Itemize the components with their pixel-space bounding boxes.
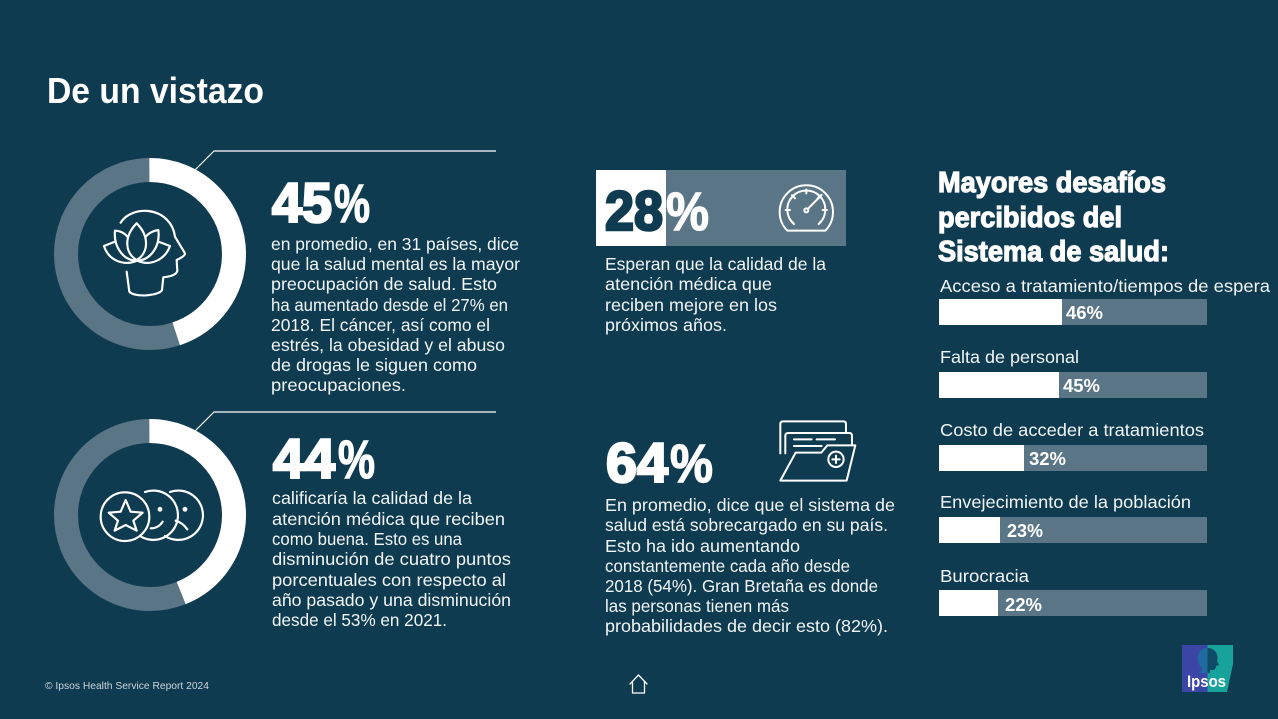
bar: ageing 23%: 23% xyxy=(1007,520,1043,541)
bar: bureaucracy 22% xyxy=(939,566,1207,616)
text block: mental health: ha aumentado desde el 27% en xyxy=(271,295,508,315)
stat: 45% xyxy=(272,171,370,234)
text block: mental health: estrés, la obesidad y el abuso xyxy=(271,335,505,355)
stat: 45%: % xyxy=(334,174,370,234)
bar: ageing 23% xyxy=(939,492,1207,543)
bar: access 46%: Acceso a tratamiento/tiempos de espera xyxy=(940,276,1270,296)
stat: 44% xyxy=(273,427,375,490)
panel: expected improvement 28% xyxy=(596,170,846,335)
text block: expected improvement: atención médica que xyxy=(605,274,772,294)
heading: challenges: Mayores desafíos xyxy=(938,167,1166,199)
stat: 64%: % xyxy=(670,434,713,494)
title: De un vistazo xyxy=(47,70,264,111)
panel: quality of care 44% xyxy=(66,412,511,630)
bar: ageing 23%: Envejecimiento de la población xyxy=(940,492,1191,512)
donut chart: 44% xyxy=(66,431,234,599)
bar: cost 32%: 32% xyxy=(1029,448,1066,469)
bar: access 46% xyxy=(939,276,1270,325)
text block: overloaded system xyxy=(605,495,895,636)
bar: bureaucracy 22%: Burocracia xyxy=(940,566,1029,586)
panel: overloaded system 64% xyxy=(605,421,895,636)
text block: quality of care xyxy=(272,488,511,630)
text block: quality of care: como buena. Esto es una xyxy=(272,529,462,549)
text block: mental health: en promedio, en 31 países, dice xyxy=(271,234,519,254)
icon: home xyxy=(630,675,647,693)
bar: cost 32% xyxy=(939,420,1207,471)
stat: 28%: % xyxy=(666,182,709,242)
stat: 28%: 28 xyxy=(605,179,663,242)
stat: 28% xyxy=(605,179,709,242)
text block: mental health: preocupaciones. xyxy=(271,375,406,395)
text block: overloaded system: constantemente cada año desde xyxy=(605,556,850,576)
bar: staffing 45% xyxy=(939,347,1207,398)
bar: cost 32%: Costo de acceder a tratamientos xyxy=(940,420,1204,440)
text block: expected improvement: reciben mejore en los xyxy=(605,295,777,315)
text block: overloaded system: las personas tienen más xyxy=(605,596,789,616)
text block: overloaded system: Esto ha ido aumentando xyxy=(605,536,800,556)
stat: 64% xyxy=(606,431,713,494)
icon: star and faces xyxy=(101,491,203,541)
text block: quality of care: desde el 53% en 2021. xyxy=(272,610,447,630)
logo: Ipsos xyxy=(1182,645,1233,692)
text block: mental health: que la salud mental es la mayor xyxy=(271,254,520,274)
stat: 64%: 64 xyxy=(606,431,668,494)
text block: mental health xyxy=(271,234,520,395)
text block: quality of care: atención médica que reciben xyxy=(272,509,505,529)
text block: overloaded system: salud está sobrecargado en su país. xyxy=(605,515,888,535)
text block: expected improvement xyxy=(605,254,826,335)
stat: 45%: 45 xyxy=(272,171,332,234)
donut chart: 45% xyxy=(66,170,234,338)
text block: overloaded system: En promedio, dice que el sistema de xyxy=(605,495,895,515)
panel: biggest challenges xyxy=(938,167,1270,616)
stat: 44%: % xyxy=(338,430,375,490)
bar: access 46%: 46% xyxy=(1066,302,1103,323)
text block: overloaded system: 2018 (54%). Gran Bretaña es donde xyxy=(605,576,878,596)
text block: quality of care: disminución de cuatro puntos xyxy=(272,549,511,569)
text block: mental health: de drogas le siguen como xyxy=(271,355,477,375)
heading: challenges: percibidos del xyxy=(938,202,1122,234)
heading: challenges xyxy=(938,167,1169,268)
icon: speedometer xyxy=(780,185,833,231)
bar: staffing 45%: Falta de personal xyxy=(940,347,1079,367)
stat: 44%: 44 xyxy=(273,427,335,490)
text block: quality of care: porcentuales con respecto al xyxy=(272,570,506,590)
text block: expected improvement: próximos años. xyxy=(605,315,727,335)
leader line xyxy=(195,412,496,431)
footer source: © Ipsos Health Service Report 2024 xyxy=(45,681,209,692)
heading: challenges: Sistema de salud: xyxy=(938,236,1169,268)
text block: expected improvement: Esperan que la calidad de la xyxy=(605,254,826,274)
text block: quality of care: calificaría la calidad de la xyxy=(272,488,472,508)
text block: mental health: 2018. El cáncer, así como el xyxy=(271,315,490,335)
text block: overloaded system: probabilidades de decir esto (82%). xyxy=(605,616,888,636)
progress bar: 28% xyxy=(596,170,846,246)
icon: head with lotus xyxy=(104,211,185,295)
panel: mental health 45% xyxy=(66,151,520,395)
icon: folder xyxy=(780,421,855,481)
text block: quality of care: año pasado y una disminución xyxy=(272,590,511,610)
bar: staffing 45%: 45% xyxy=(1063,375,1100,396)
logo: Ipsos: Ipsos xyxy=(1187,673,1226,691)
text block: mental health: preocupación de salud. Esto xyxy=(271,274,497,294)
leader line xyxy=(195,151,496,170)
bar: bureaucracy 22%: 22% xyxy=(1005,594,1042,615)
